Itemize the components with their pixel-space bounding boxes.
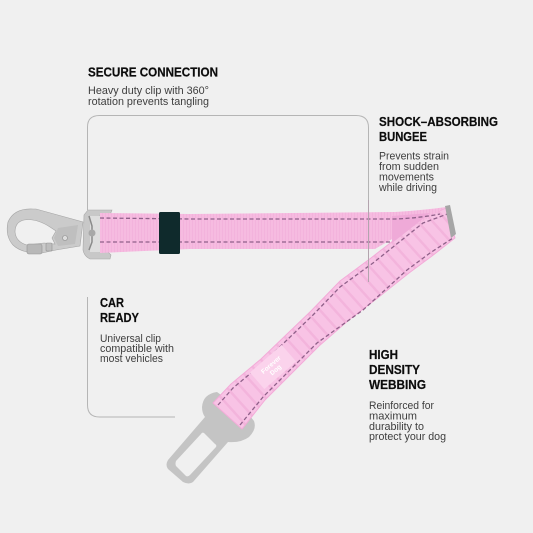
screw gate — [27, 244, 42, 254]
text: secure connection: rotation prevents tangling — [88, 96, 209, 108]
callout frame lines — [88, 116, 368, 417]
text: secure connection: Heavy duty clip with 360° — [88, 85, 209, 97]
text: shock-absorbing bungee: movements — [379, 172, 435, 184]
text: high density webbing: DENSITY — [369, 363, 421, 377]
text: shock-absorbing bungee — [378, 115, 498, 194]
text: car ready — [100, 296, 174, 365]
hook shading — [54, 225, 78, 246]
text: car ready: compatible with — [100, 343, 174, 355]
text: shock-absorbing bungee: Prevents strain — [379, 150, 449, 162]
text: high density webbing — [369, 348, 446, 443]
redraw right callout line over strap — [368, 200, 370, 282]
dark velcro keeper — [159, 212, 180, 254]
upper webbing strap — [100, 207, 446, 253]
seatbelt buckle — [166, 392, 255, 484]
text: car ready: READY — [100, 311, 140, 325]
brand tag: Dog — [269, 364, 283, 377]
text: shock-absorbing bungee: BUNGEE — [379, 130, 427, 144]
text: high density webbing: maximum — [369, 410, 417, 422]
lower bungee strap — [213, 208, 455, 429]
text: high density webbing: durability to — [369, 421, 424, 433]
text: car ready: CAR — [100, 296, 124, 310]
stitching — [218, 213, 450, 405]
text: shock-absorbing bungee: while driving — [378, 182, 437, 194]
pleated fold near the slider — [392, 213, 430, 243]
text: secure connection: SECURE CONNECTION — [88, 66, 218, 80]
brand tag: Forever — [260, 354, 283, 376]
metal D-ring — [83, 210, 112, 259]
stitching — [100, 214, 440, 219]
text: high density webbing: WEBBING — [369, 378, 426, 392]
metal carabiner clip — [7, 209, 83, 254]
text: shock-absorbing bungee: SHOCK–ABSORBING — [379, 115, 498, 129]
right metal slider — [445, 205, 456, 238]
text: shock-absorbing bungee: from sudden — [379, 161, 439, 173]
text: secure connection — [88, 66, 218, 108]
brand tag — [250, 345, 296, 389]
text: car ready: Universal clip — [100, 333, 161, 345]
clip rivet — [62, 236, 68, 240]
text: car ready: most vehicles — [100, 353, 164, 365]
text: high density webbing: HIGH — [369, 348, 398, 362]
text: high density webbing: Reinforced for — [369, 400, 434, 412]
text: high density webbing: protect your dog — [369, 431, 446, 443]
